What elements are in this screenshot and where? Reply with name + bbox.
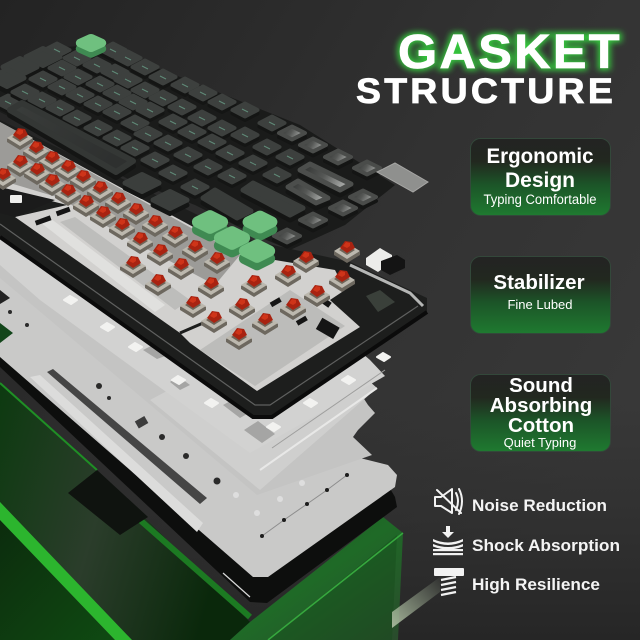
feature: shock absorption: Shock Absorption [472, 537, 620, 555]
panel: stabilizer [470, 256, 610, 334]
black stand [68, 470, 148, 535]
space bar [10, 103, 133, 177]
title: GASKET [398, 25, 620, 79]
panel: ergonomic design: Design [505, 169, 575, 192]
bottom case [0, 250, 397, 603]
PCB layer [0, 180, 385, 470]
white gasket tabs [64, 296, 390, 431]
feature: noise reduction: Noise Reduction [472, 497, 607, 515]
panel: ergonomic design: Ergonomic [486, 145, 594, 168]
panel: ergonomic design [470, 138, 610, 216]
keyboard underside shadow [0, 45, 395, 250]
icon: spring [434, 568, 464, 595]
panel: stabilizer: Stabilizer [493, 271, 585, 294]
dark foam bar [47, 369, 207, 504]
bottom plate [0, 250, 397, 577]
tile strip [30, 375, 203, 532]
metal stabilizer plate [377, 163, 428, 192]
USB dongle [366, 248, 405, 275]
red switches [0, 128, 360, 350]
switch plate [0, 122, 360, 391]
panel: sound absorbing cotton: Absorbing [490, 394, 592, 417]
title [356, 25, 620, 111]
panel: sound absorbing cotton [470, 374, 610, 452]
feature: high resilience: High Resilience [472, 576, 600, 594]
panel: stabilizer: Fine Lubed [507, 297, 573, 312]
panel: sound absorbing cotton: Cotton [508, 414, 574, 437]
middle foam layer [0, 200, 377, 495]
panel: ergonomic design: Typing Comfortable [484, 192, 596, 207]
icon: muted speaker [435, 489, 462, 514]
glass corner bar [350, 265, 423, 306]
dark keycaps [0, 44, 302, 214]
title: GASKET [398, 25, 620, 79]
green glowing desk [0, 383, 440, 640]
inner dark port recess [366, 290, 395, 312]
case edge highlight [223, 573, 250, 597]
icon: shock absorption [433, 526, 463, 555]
screws [260, 473, 349, 538]
transparent case frame [0, 120, 427, 417]
panel: sound absorbing cotton: Quiet Typing [504, 435, 576, 450]
panel: sound absorbing cotton: Sound [509, 374, 573, 397]
title: STRUCTURE [356, 71, 613, 111]
green accent keycaps [80, 38, 272, 265]
glossy right-side keycaps [203, 126, 380, 246]
